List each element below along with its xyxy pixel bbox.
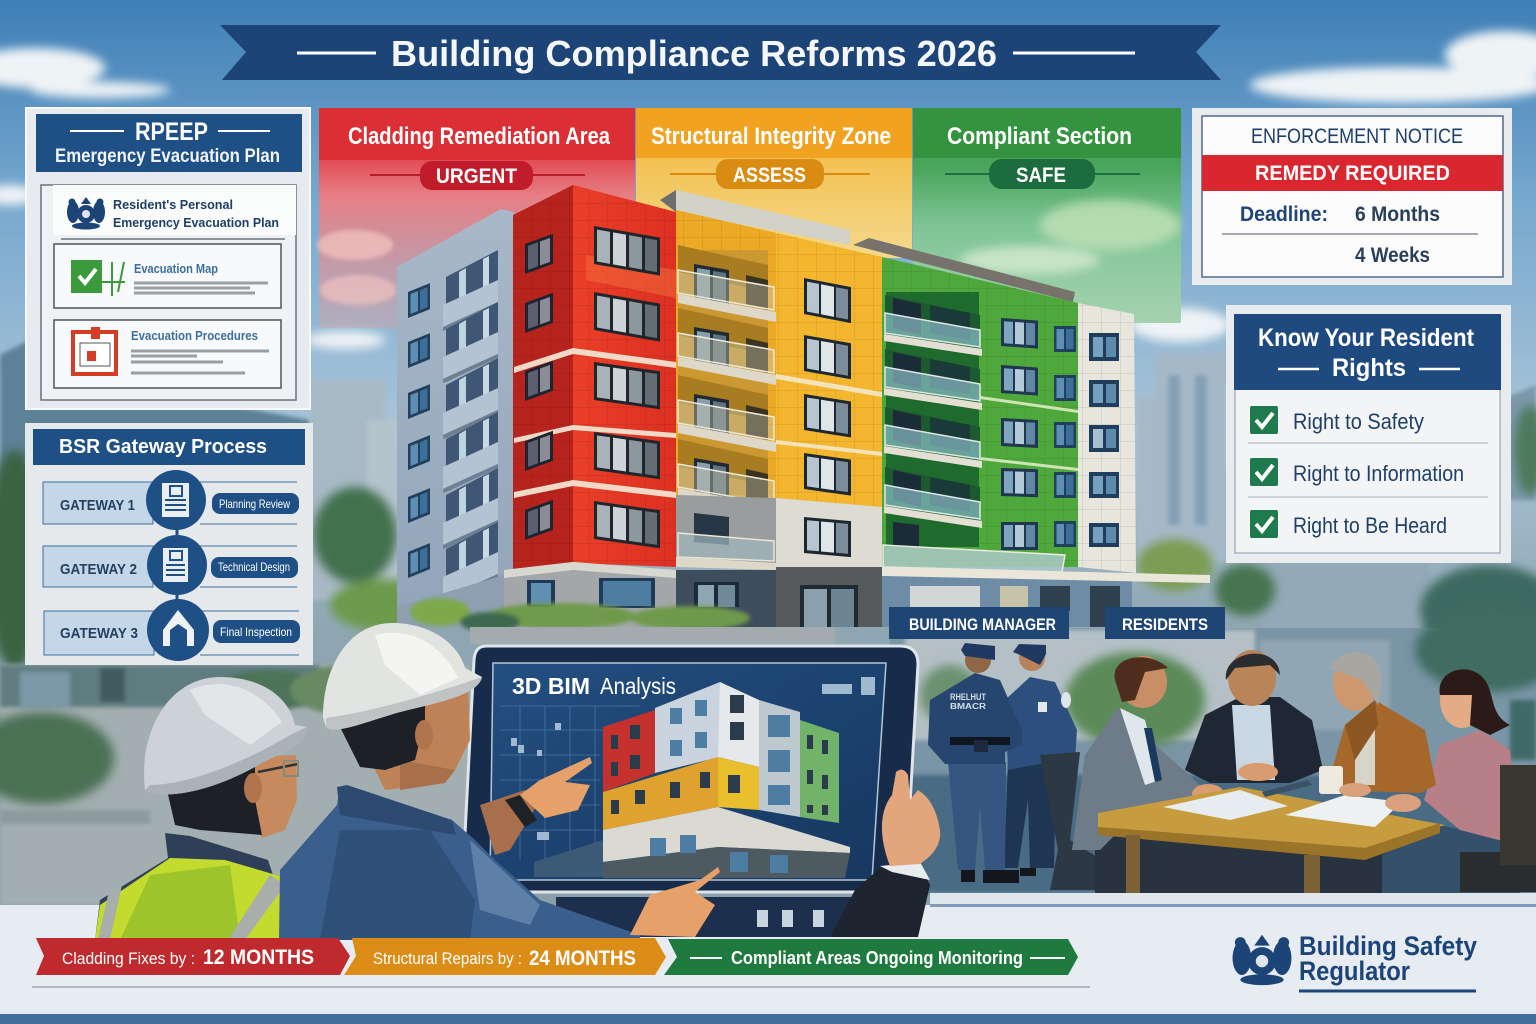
tablet lower band <box>556 897 858 937</box>
right to safety <box>1250 406 1424 434</box>
rights heading <box>1234 314 1501 390</box>
building: ground floor <box>504 562 1210 627</box>
right to information: Right to Information <box>1293 461 1464 486</box>
panel: enforcement notice: 4 Weeks <box>1355 244 1430 267</box>
distant low block left <box>0 665 410 715</box>
logo wordmark: Regulator <box>1299 956 1410 986</box>
RPEEP heading: RPEEP <box>135 118 208 146</box>
zone panel: structural integrity <box>636 108 912 258</box>
building illustration <box>397 185 1210 644</box>
card: evacuation map: Evacuation Map <box>134 262 218 276</box>
panel: BSR gateway process <box>25 423 313 665</box>
RPEEP heading <box>36 114 302 172</box>
timeline arrow: compliant areas: Compliant Areas Ongoing Monitoring <box>731 948 1023 968</box>
label: building manager: BUILDING MANAGER <box>909 615 1056 634</box>
building: white end section <box>1078 303 1136 573</box>
face <box>248 755 297 838</box>
label: building manager <box>889 607 1069 639</box>
label: residents: RESIDENTS <box>1122 615 1208 634</box>
gateway 3 row <box>44 599 300 661</box>
RPEEP heading: Emergency Evacuation Plan <box>55 146 280 167</box>
icon: crest <box>1233 935 1291 985</box>
hard hat <box>144 677 307 794</box>
building safety regulator logo <box>1233 931 1477 991</box>
front officer: RHELHUT <box>950 692 986 702</box>
front officer <box>928 643 1022 883</box>
person: man in brown jacket <box>1326 652 1436 793</box>
card: evacuation procedures: Evacuation Procedures <box>131 329 258 343</box>
icon: crest <box>67 197 105 230</box>
zone panel: cladding remediation <box>317 108 635 328</box>
zone panel: structural integrity: Structural Integrity Zone <box>651 123 891 150</box>
logo wordmark: Building Safety <box>1299 931 1477 961</box>
lower hand <box>630 867 720 937</box>
panel: enforcement notice: ENFORCEMENT NOTICE <box>1251 125 1463 148</box>
right to be heard <box>1250 510 1447 538</box>
engineer body <box>279 787 640 940</box>
3D BIM title: 3D BIM <box>512 673 590 699</box>
building: red cladding section <box>513 185 676 570</box>
gateway 1 row <box>43 470 299 530</box>
tablet with 3D BIM analysis <box>462 646 918 937</box>
hard hat <box>323 623 482 729</box>
timeline arrow: cladding fixes: 12 MONTHS <box>203 946 314 969</box>
legs under table <box>1095 830 1420 893</box>
pointing hand <box>520 757 592 818</box>
person: man in grey suit <box>1072 656 1224 850</box>
person: man in dark suit <box>1185 650 1323 783</box>
rear officer <box>1004 644 1077 876</box>
resident meeting table group <box>1040 650 1536 893</box>
gateway heading: BSR Gateway Process <box>59 436 267 458</box>
zone panel: compliant section: SAFE <box>1016 164 1066 187</box>
timeline arrow: structural repairs <box>344 938 666 975</box>
right to safety: Right to Safety <box>1293 409 1424 434</box>
plan title: Emergency Evacuation Plan <box>113 215 279 230</box>
building: grey left wing <box>397 209 514 627</box>
card: evacuation map <box>54 244 281 308</box>
gateway 2 row <box>43 535 298 595</box>
building: green compliant section <box>853 238 1078 572</box>
timeline arrow: structural repairs: Structural Repairs by : <box>373 949 522 968</box>
screen chips <box>511 677 875 840</box>
timeline arrow: compliant areas <box>664 939 1078 975</box>
panel: enforcement notice <box>1192 108 1512 285</box>
timeline arrow: cladding fixes: Cladding Fixes by : <box>62 949 195 968</box>
right to information <box>1250 458 1464 486</box>
zone panel: cladding remediation: URGENT <box>436 165 517 188</box>
worker in vest <box>95 677 345 940</box>
engineer pointing at tablet <box>279 623 720 940</box>
papers and coffee <box>1163 766 1421 827</box>
remedy banner <box>1202 155 1503 191</box>
timeline arrow: cladding fixes <box>36 938 350 975</box>
zone panel: compliant section <box>913 108 1181 323</box>
gateway 2 row: GATEWAY 2 <box>60 561 137 578</box>
zone panel: compliant section: Compliant Section <box>947 123 1132 150</box>
building: yellow cladding section <box>660 190 882 570</box>
person: right woman <box>1382 669 1536 893</box>
zone panel: structural integrity: ASSESS <box>733 164 806 187</box>
title banner: Building Compliance Reforms 2026 <box>391 33 997 74</box>
gateway 2 row: Technical Design <box>218 560 290 574</box>
remedy banner: REMEDY REQUIRED <box>1255 162 1450 185</box>
mini building model <box>534 682 850 878</box>
card: evacuation procedures <box>54 320 281 388</box>
face <box>370 678 470 790</box>
3D BIM title: Analysis <box>600 673 676 699</box>
zone panel: cladding remediation: Cladding Remediation Area <box>348 123 611 150</box>
screen grid <box>500 706 640 860</box>
hand holding tablet <box>830 770 940 937</box>
police officers <box>928 643 1077 883</box>
plan title: Resident's Personal <box>113 197 233 212</box>
rights heading: Know Your Resident <box>1258 324 1475 352</box>
panel: enforcement notice: Deadline: <box>1240 203 1328 226</box>
gateway 1 row: GATEWAY 1 <box>60 497 135 514</box>
gateway 3 row: GATEWAY 3 <box>60 625 138 642</box>
table <box>1098 787 1445 893</box>
chair <box>1040 752 1102 890</box>
timeline arrow: structural repairs: 24 MONTHS <box>529 947 636 970</box>
vest and shirt <box>95 833 345 940</box>
right to be heard: Right to Be Heard <box>1293 513 1447 538</box>
gateway heading <box>33 429 305 465</box>
title banner <box>220 25 1221 80</box>
shrubs and low wall <box>410 598 835 644</box>
panel: know your resident rights <box>1226 305 1511 563</box>
panel: RPEEP emergency evacuation plan <box>26 108 310 409</box>
front officer: BMACR <box>950 702 986 711</box>
rights heading: Rights <box>1332 354 1406 382</box>
gateway 3 row: Final Inspection <box>220 625 292 639</box>
panel: enforcement notice: 6 Months <box>1355 203 1440 226</box>
label: residents <box>1105 607 1225 639</box>
gateway 1 row: Planning Review <box>219 497 290 511</box>
